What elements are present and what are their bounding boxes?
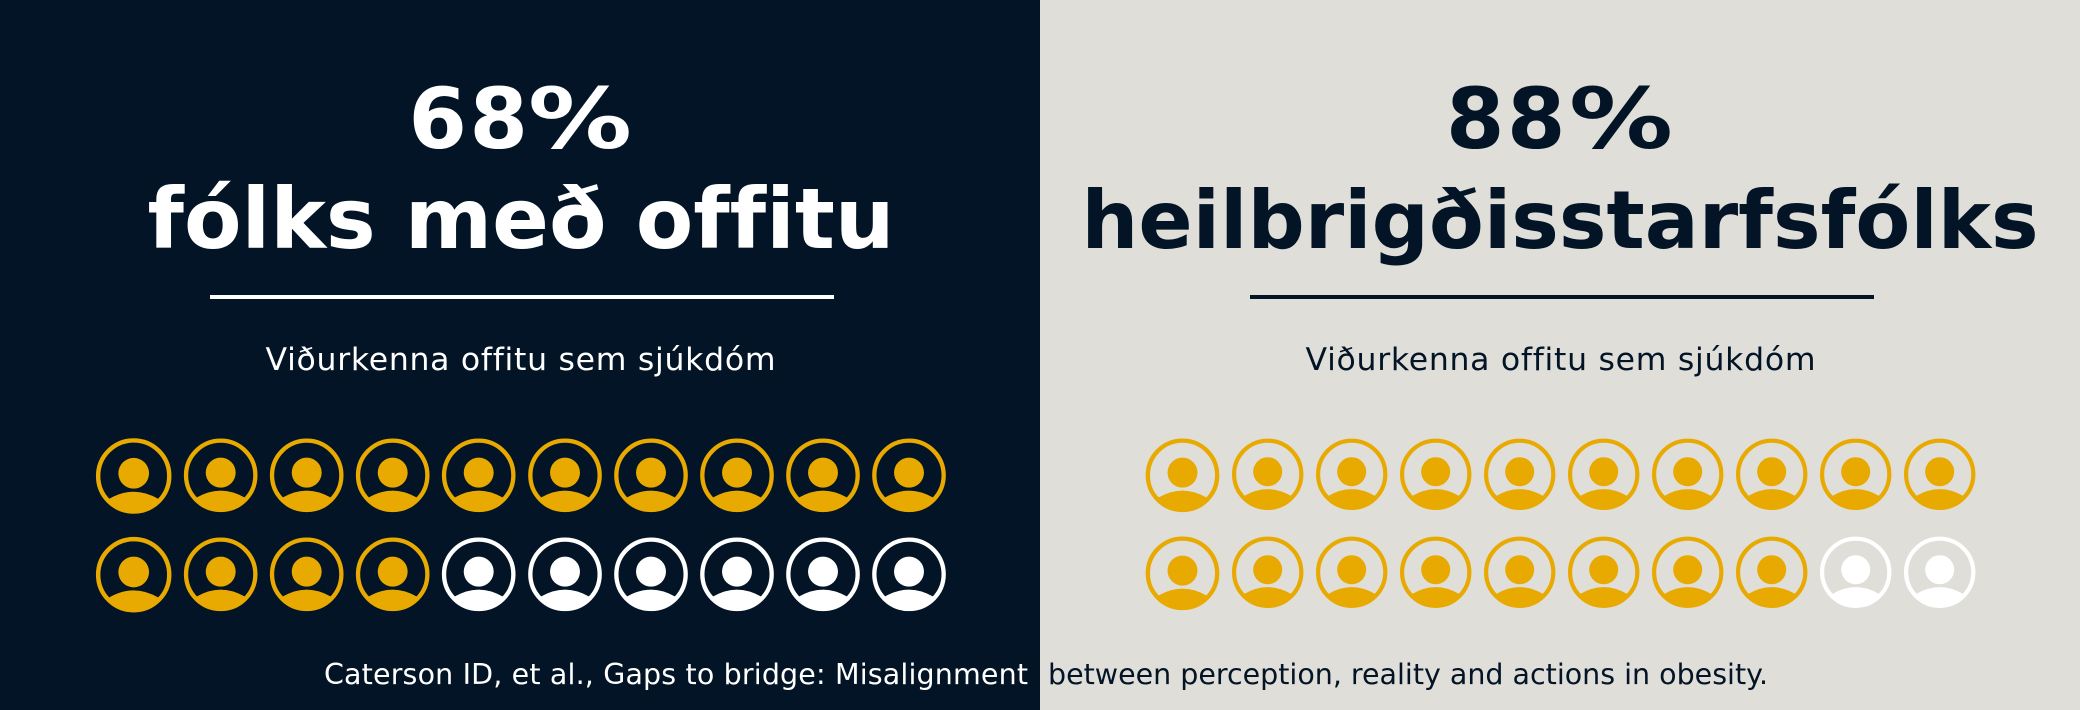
- heading: people with obesity: fólks með offitu: [148, 170, 894, 268]
- subheading: left: Viðurkenna offitu sem sjúkdóm: [266, 342, 776, 378]
- heading: 88%: 88: [1446, 70, 1565, 168]
- heading: 68%: 68: [408, 70, 528, 168]
- heading: 88%: %: [1569, 70, 1673, 168]
- divider: left: [210, 295, 834, 299]
- icon: person row 2 gold: [98, 539, 427, 610]
- heading: healthcare professionals: heilbrigðisstarfsfólks: [1081, 174, 2039, 267]
- icon grid: left, 68%: [98, 440, 944, 610]
- icon grid: right, 88%: [1148, 441, 1973, 608]
- icon: person row 2 white: [444, 540, 944, 609]
- citation: left part: Caterson ID, et al., Gaps to bridge: Misalignment: [324, 658, 1028, 691]
- panel: right light background: [1040, 0, 2080, 710]
- icon: person row 1: [1148, 441, 1973, 510]
- divider: right: [1250, 295, 1874, 299]
- icon: person row 1: [98, 440, 944, 512]
- citation: right part: between perception, reality and actions in obesity.: [1048, 658, 1768, 691]
- icon: person row 2 white: [1822, 539, 1973, 606]
- heading: 68%: %: [528, 70, 632, 168]
- icon: person row 2 gold: [1148, 539, 1805, 608]
- subheading: right: Viðurkenna offitu sem sjúkdóm: [1306, 342, 1816, 378]
- panel: left dark background: [0, 0, 1040, 710]
